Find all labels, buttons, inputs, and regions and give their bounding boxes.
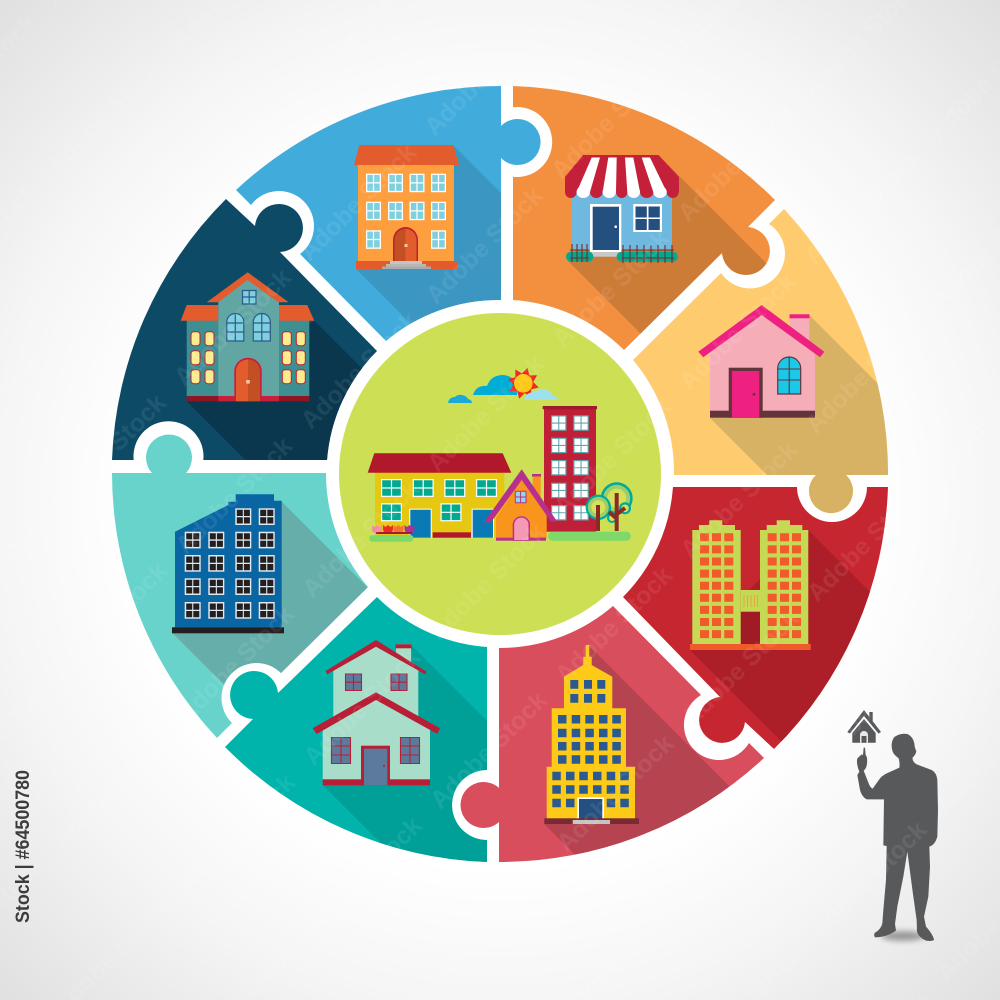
infographic: puzzle wheel of buildings <box>15 86 938 944</box>
figure: man pointing at house icon <box>847 710 938 941</box>
long shadow: orange <box>567 160 766 334</box>
long shadow: light teal <box>173 502 368 685</box>
icon: orange apartment building <box>354 145 459 269</box>
long shadow: yellow <box>710 316 888 514</box>
icon: blue tower block <box>172 494 284 633</box>
panel: dark teal sector with two-storey house <box>225 597 487 862</box>
icon: trees <box>586 482 633 531</box>
long shadow: pink <box>544 646 730 854</box>
long shadow: dark teal <box>324 646 487 862</box>
long shadow: navy <box>187 321 362 460</box>
icon: small cloud <box>448 395 472 403</box>
panel: blue sector with apartment building <box>236 86 540 341</box>
icon: large cloud <box>473 375 517 395</box>
white wheel base <box>112 86 888 862</box>
icon: manor house <box>181 272 314 401</box>
icon: bushes <box>548 532 631 541</box>
icon: yellow skyscraper <box>544 645 639 824</box>
panel: orange sector with shop <box>513 86 775 350</box>
panel: yellow sector with pink house <box>633 209 888 514</box>
stock number label: Stock | #64500780 <box>13 770 34 923</box>
icon: twin tower block <box>690 520 811 650</box>
icon: sun <box>504 364 543 403</box>
icon: red tower <box>543 406 597 532</box>
icon: orange cottage <box>484 469 557 541</box>
panel: pink sector with skyscraper <box>460 606 764 862</box>
panel: central green circle with town scene <box>339 313 661 635</box>
panel: red sector with twin towers <box>623 487 888 749</box>
icon: small house <box>847 710 881 743</box>
icon: two-storey mint house <box>313 640 440 785</box>
long shadow: red <box>690 530 870 742</box>
icon: flower bed <box>369 525 414 542</box>
icon: yellow terrace building <box>368 453 511 538</box>
icon: shop with striped awning <box>565 155 679 263</box>
long shadow: blue <box>356 146 501 324</box>
panel: navy sector with manor house <box>112 199 377 460</box>
man ground shadow <box>881 931 925 941</box>
panel: light teal sector with blue tower <box>112 435 382 738</box>
icon: pale cloud <box>524 389 558 400</box>
icon: pink house <box>698 305 824 418</box>
silhouette: man <box>857 734 938 941</box>
